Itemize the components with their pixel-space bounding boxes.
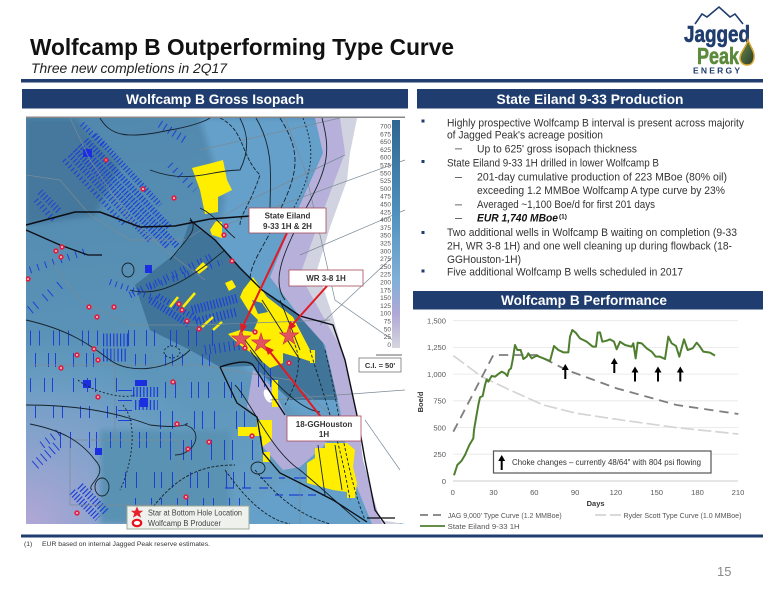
isopach colour scale: 450	[380, 202, 391, 208]
isopach colour scale: 325	[380, 240, 391, 248]
producer well markers	[26, 158, 291, 515]
purple thin zone	[270, 118, 400, 524]
bullet list: Two additional wells in Wolfcamp B waiting on completion (9-33	[447, 227, 737, 239]
x axis labels: 150	[650, 488, 663, 497]
bullet list: exceeding 1.2 MMBoe Wolfcamp A type curve by 23%	[477, 185, 725, 197]
bullet list: 2H, WR 3-8 1H) and one well cleaning up during flowback (18-	[447, 240, 732, 252]
bullet list: State Eiland 9-33 1H drilled in lower Wolfcamp B	[447, 158, 659, 170]
isopach colour scale: 175	[380, 287, 391, 294]
x axis labels: 60	[530, 488, 539, 497]
isopach colour scale: 250	[380, 264, 391, 271]
choke change arrows	[562, 358, 684, 382]
y axis labels: 750	[433, 397, 446, 406]
bottom rule	[21, 534, 763, 538]
axis titles: Days	[587, 499, 605, 508]
chart legend: State Eiland 9-33 1H	[448, 522, 520, 531]
y axis labels: 500	[433, 423, 446, 432]
yellow acreage	[170, 160, 357, 498]
y axis labels: 1,500	[427, 316, 446, 326]
bullet list: Up to 625' gross isopach thickness	[477, 144, 637, 156]
callout: choke changes	[494, 451, 711, 473]
bullet list: 201-day cumulative production of 223 MBoe (80% oil)	[477, 172, 727, 184]
red leader arrows	[240, 233, 327, 417]
x axis labels: 30	[489, 488, 498, 497]
white area beyond the zero line	[317, 118, 405, 524]
icon: producer ring	[133, 520, 141, 526]
y axis labels: 250	[433, 450, 446, 459]
isopach colour scale: 700	[380, 124, 391, 130]
title: Wolfcamp B Outperforming Type Curve	[30, 34, 454, 60]
isopach colour scale: 475	[380, 194, 391, 201]
isopach colour scale: 550	[380, 170, 391, 177]
fault lines	[26, 212, 395, 524]
isopach colour scale: 375	[380, 225, 391, 232]
logo: Jagged Peak Energy: Jagged	[684, 21, 750, 47]
isopach colour scale: 500	[380, 186, 391, 193]
isopach colour scale: 100	[380, 311, 391, 318]
x axis labels: 90	[571, 488, 579, 497]
bullet list: of Jagged Peak's acreage position	[447, 130, 603, 142]
map legend	[127, 506, 249, 529]
isopach colour scale: 300	[380, 248, 391, 255]
isopach colour scale: 625	[380, 147, 391, 154]
subtitle: Three new completions in 2Q17	[31, 61, 227, 76]
isopach colour scale: 25	[384, 334, 391, 341]
panel heading: State Eiland 9-33 Production: State Eiland 9-33 Production	[496, 91, 684, 107]
bullet list: EUR 1,740 MBoe	[477, 213, 558, 225]
bullet list: Five additional Wolfcamp B wells scheduled in 2017	[447, 267, 683, 279]
lease grid	[26, 118, 405, 524]
x axis labels: 180	[691, 488, 704, 497]
isopach colour scale	[380, 120, 400, 349]
line chart: Boe/d vs days: Boe/d	[416, 391, 425, 412]
bullet list: Averaged ~1,100 Boe/d for first 201 days	[477, 199, 655, 211]
isopach colour scale: 150	[380, 295, 391, 302]
x axis labels: 0	[451, 488, 455, 497]
callout: WR 3-8 1H	[289, 270, 363, 286]
x axis labels: 120	[610, 488, 622, 497]
line chart: Boe/d vs days	[416, 316, 744, 531]
panel: isopach map	[26, 116, 405, 525]
bottom-hole location stars	[232, 326, 298, 351]
callout: choke changes: Choke changes – currently 48/64" with 804 psi flowing	[512, 457, 701, 467]
callout: State Eiland: 9-33 1H & 2H	[263, 222, 312, 231]
isopach colour scale: 200	[380, 280, 391, 286]
isopach colour scale: 275	[380, 256, 391, 263]
footnote: EUR based on internal Jagged Peak reserve estimates.	[42, 541, 210, 548]
contour interval note	[359, 355, 402, 372]
bullet list: GGHouston-1H)	[447, 254, 521, 266]
isopach colour scale: 50	[384, 326, 391, 333]
isopach colour scale: 525	[380, 178, 391, 185]
map background isopach shading	[26, 118, 405, 525]
panel heading: Wolfcamp B Gross Isopach	[22, 89, 408, 108]
isopach colour scale: 675	[380, 131, 391, 138]
isopach colour scale: 75	[384, 318, 391, 326]
isopach colour scale: 350	[380, 233, 391, 240]
contour interval note: C.I. = 50'	[365, 361, 395, 370]
callout: 18-GGHouston 1H: 1H	[319, 430, 329, 439]
isopach colour scale: 225	[380, 272, 391, 279]
logo: Jagged Peak Energy: ENERGY	[693, 66, 740, 76]
y axis labels	[427, 316, 446, 486]
y axis labels: 1,000	[427, 370, 446, 379]
isopach colour scale: 400	[380, 217, 391, 224]
callout: 18-GGHouston 1H: 18-GGHouston	[296, 420, 352, 429]
bullet list: Highly prospective Wolfcamp B interval is present across majority	[447, 118, 744, 130]
isopach colour scale: 425	[380, 209, 391, 216]
footnote: (1)	[24, 541, 32, 548]
isopach colour scale: 0	[387, 342, 391, 349]
panel heading: Wolfcamp B Performance	[413, 291, 763, 310]
logo: Jagged Peak Energy: Peak	[697, 43, 739, 69]
chart legend: Ryder Scott Type Curve (1.0 MMBoe)	[624, 511, 742, 520]
isopach colour scale: 650	[380, 139, 391, 146]
thin contour lines	[26, 118, 365, 525]
panel heading: Wolfcamp B Performance: Wolfcamp B Performance	[501, 292, 667, 308]
y axis labels: 0	[442, 477, 446, 486]
bullet list	[422, 118, 744, 279]
isopach colour scale: 575	[380, 162, 391, 170]
map legend: Wolfcamp B Producer	[148, 519, 221, 528]
callout: 18-GGHouston 1H	[287, 416, 361, 441]
series curves	[453, 330, 738, 475]
callout: State Eiland	[249, 208, 326, 233]
y axis labels: 1,250	[427, 343, 446, 352]
isopach colour scale: 125	[380, 303, 391, 310]
logo: Jagged Peak Energy	[684, 7, 754, 76]
x axis labels: 210	[732, 488, 744, 497]
chart legend	[420, 511, 742, 531]
map legend: Star at Bottom Hole Location	[148, 508, 242, 518]
icon: red star	[131, 506, 143, 518]
x axis labels	[451, 488, 744, 497]
panel heading: State Eiland 9-33 Production	[417, 89, 763, 108]
dark fault block	[135, 220, 340, 400]
chart legend: JAG 9,000' Type Curve (1.2 MMBoe)	[448, 511, 562, 520]
panel heading: Wolfcamp B Gross Isopach: Wolfcamp B Gross Isopach	[126, 91, 304, 107]
bullet list: (1)	[559, 214, 567, 220]
isopach colour scale: 600	[380, 155, 391, 162]
callout: WR 3-8 1H: WR 3-8 1H	[306, 274, 346, 283]
callout: State Eiland: State Eiland	[265, 212, 311, 220]
page number: 15	[717, 564, 731, 579]
header rule	[21, 79, 763, 82]
well hatching	[30, 124, 325, 518]
